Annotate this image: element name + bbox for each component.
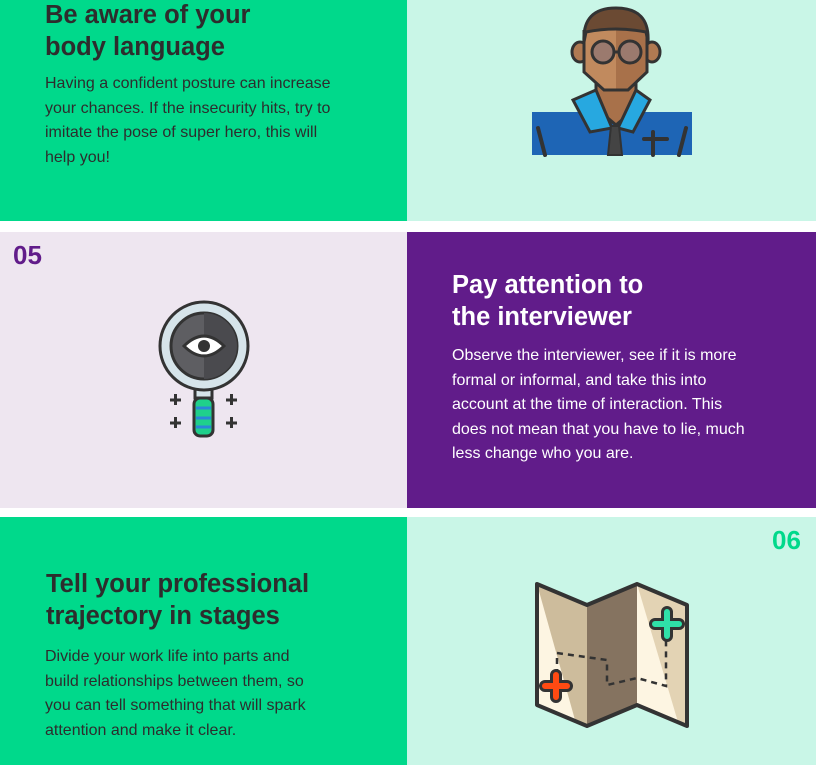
text block (45, 75, 331, 166)
panel: man icon (407, 0, 816, 221)
heading (46, 570, 309, 630)
text block: formal or informal, and take this into (452, 372, 706, 388)
heading: Tell your professional (46, 570, 309, 598)
panel: map icon (407, 517, 816, 765)
text block: attention and make it clear. (45, 722, 236, 738)
heading (45, 1, 250, 61)
panel: trajectory text (0, 517, 407, 765)
text block (45, 648, 306, 738)
text block: you can tell something that will spark (45, 697, 306, 714)
icon: man (532, 6, 692, 157)
number 06: 06 (772, 525, 801, 555)
panel: body language text (0, 0, 407, 221)
text block: account at the time of interaction. This (452, 396, 722, 413)
text block: does not mean that you have to lie, much (452, 420, 745, 438)
number 05: 05 (13, 240, 42, 270)
icon: map (535, 582, 689, 728)
text block: help you! (45, 148, 110, 166)
panel: interviewer text (407, 232, 816, 508)
text block: less change who you are. (452, 445, 633, 462)
heading: the interviewer (452, 303, 632, 331)
heading (452, 271, 643, 331)
text block: Divide your work life into parts and (45, 648, 290, 665)
text block: your chances. If the insecurity hits, try to (45, 100, 330, 116)
panel: magnifier icon (0, 232, 407, 508)
text block: Observe the interviewer, see if it is more (452, 347, 737, 364)
heading: Be aware of your (45, 1, 250, 29)
heading: Pay attention to (452, 271, 643, 299)
text block: build relationships between them, so (45, 672, 304, 690)
text block: imitate the pose of super hero, this will (45, 124, 317, 141)
text block (452, 347, 745, 462)
heading: body language (45, 33, 225, 61)
text block: Having a confident posture can increase (45, 75, 331, 92)
heading: trajectory in stages (46, 602, 280, 630)
icon: magnifier (158, 300, 250, 438)
